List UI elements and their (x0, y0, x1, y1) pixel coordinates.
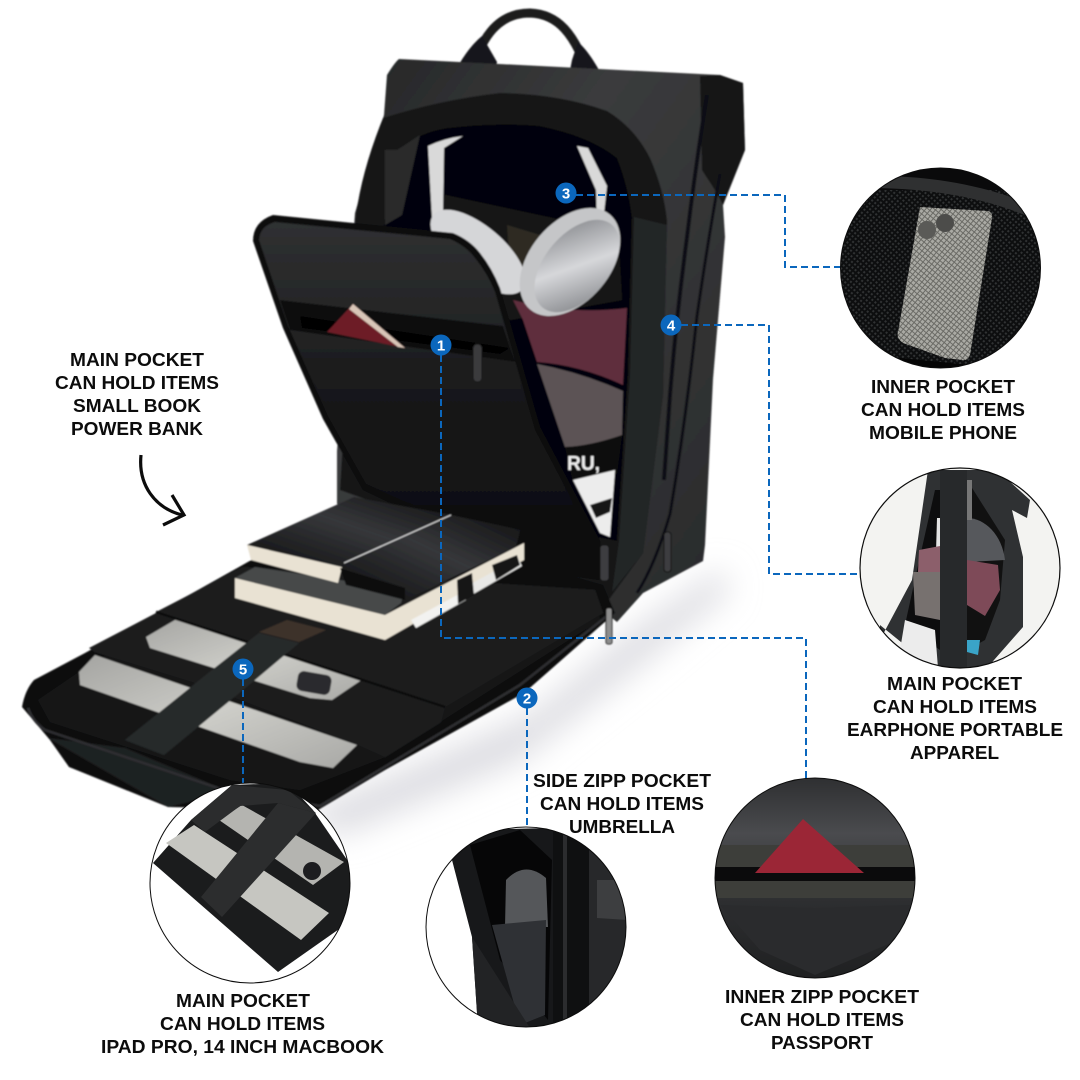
leader line 5 (242, 679, 244, 786)
label: main pocket ipad: MAIN POCKET (176, 990, 311, 1011)
leader line 2 (526, 708, 528, 826)
flap pocket (280, 300, 515, 362)
detail circle: side view main pocket (860, 468, 1061, 670)
detail circle: phone in mesh pocket (840, 168, 1041, 372)
badge 1: 1 (437, 338, 445, 354)
label: main pocket earphone: CAN HOLD ITEMS (873, 696, 1037, 717)
headphones (417, 136, 640, 335)
badge 4: 4 (667, 318, 676, 334)
label: inner zipp pocket: CAN HOLD ITEMS (740, 1009, 904, 1030)
tablet (146, 617, 366, 700)
handle (448, 13, 608, 104)
label: inner pocket: INNER POCKET (871, 376, 1016, 397)
inner compartment (384, 124, 632, 541)
badge 2 (516, 688, 538, 708)
label: side zipp pocket: SIDE ZIPP POCKET (533, 770, 712, 791)
pen (411, 555, 522, 628)
backpack body (337, 59, 745, 622)
umbrella canopy (492, 920, 546, 1025)
badge 4 (660, 314, 682, 336)
label: main pocket small book: MAIN POCKET (70, 349, 205, 370)
black tee with RU print (565, 435, 622, 482)
black tee with RU print: RU, (567, 453, 600, 475)
zipper band around opening (340, 93, 667, 605)
red passport corner (755, 819, 864, 873)
laptop (79, 655, 357, 768)
leader line 4 (681, 325, 860, 574)
front flap (253, 215, 606, 581)
label: main pocket small book: CAN HOLD ITEMS (55, 372, 219, 393)
umbrella handle (505, 869, 548, 927)
badge 3 (556, 182, 576, 204)
maroon sweater (513, 300, 627, 385)
zipper pulls (600, 532, 671, 644)
curved arrow (141, 455, 184, 525)
label: main pocket earphone: MAIN POCKET (887, 673, 1023, 694)
side folded lining (700, 75, 745, 205)
label: inner zipp pocket: PASSPORT (771, 1032, 874, 1053)
label: main pocket ipad (101, 990, 385, 1057)
grey sweater (537, 364, 623, 447)
label: inner zipp pocket (725, 986, 920, 1053)
label: side zipp pocket: UMBRELLA (569, 816, 675, 837)
floor shadow (300, 570, 730, 835)
label: main pocket ipad: IPAD PRO, 14 INCH MACBOOK (101, 1036, 385, 1057)
label: main pocket earphone (847, 673, 1063, 763)
label: main pocket earphone: APPAREL (910, 742, 999, 763)
label: side zipp pocket: CAN HOLD ITEMS (540, 793, 704, 814)
label: inner pocket: CAN HOLD ITEMS (861, 399, 1025, 420)
bottom shell (22, 510, 615, 810)
badge 2: 2 (523, 690, 531, 708)
label: inner zipp pocket: INNER ZIPP POCKET (725, 986, 920, 1007)
badge 5: 5 (239, 662, 247, 678)
laptop sleeve floor (38, 575, 600, 790)
badge 5 (232, 658, 254, 680)
power bank (340, 515, 520, 600)
label: inner pocket (861, 376, 1025, 443)
detail circle: tablet and laptop pocket (149, 782, 352, 985)
badge 3: 3 (562, 186, 570, 202)
red book in pocket (327, 304, 405, 348)
label: main pocket earphone: EARPHONE PORTABLE (847, 719, 1063, 740)
label: inner pocket: MOBILE PHONE (869, 422, 1017, 443)
top pocket (156, 567, 603, 707)
detail circle: passport pocket (714, 777, 916, 979)
backpack illustration (22, 13, 745, 810)
badge 1 (430, 334, 452, 356)
zipper pull (473, 344, 482, 382)
label: main pocket ipad: CAN HOLD ITEMS (160, 1013, 325, 1034)
strap (125, 620, 326, 755)
label: main pocket small book: POWER BANK (71, 418, 204, 439)
zipper edge (28, 612, 612, 806)
leader line 1 (441, 355, 806, 778)
detail circle: umbrella (425, 826, 628, 1029)
label: side zipp pocket (533, 770, 712, 837)
middle pocket (89, 613, 445, 757)
label: main pocket small book (55, 349, 219, 439)
white clothing (573, 470, 615, 537)
leader line 3 (576, 195, 842, 267)
upper notebook (247, 497, 451, 583)
label: main pocket small book: SMALL BOOK (73, 395, 202, 416)
flat notebook (235, 543, 524, 640)
